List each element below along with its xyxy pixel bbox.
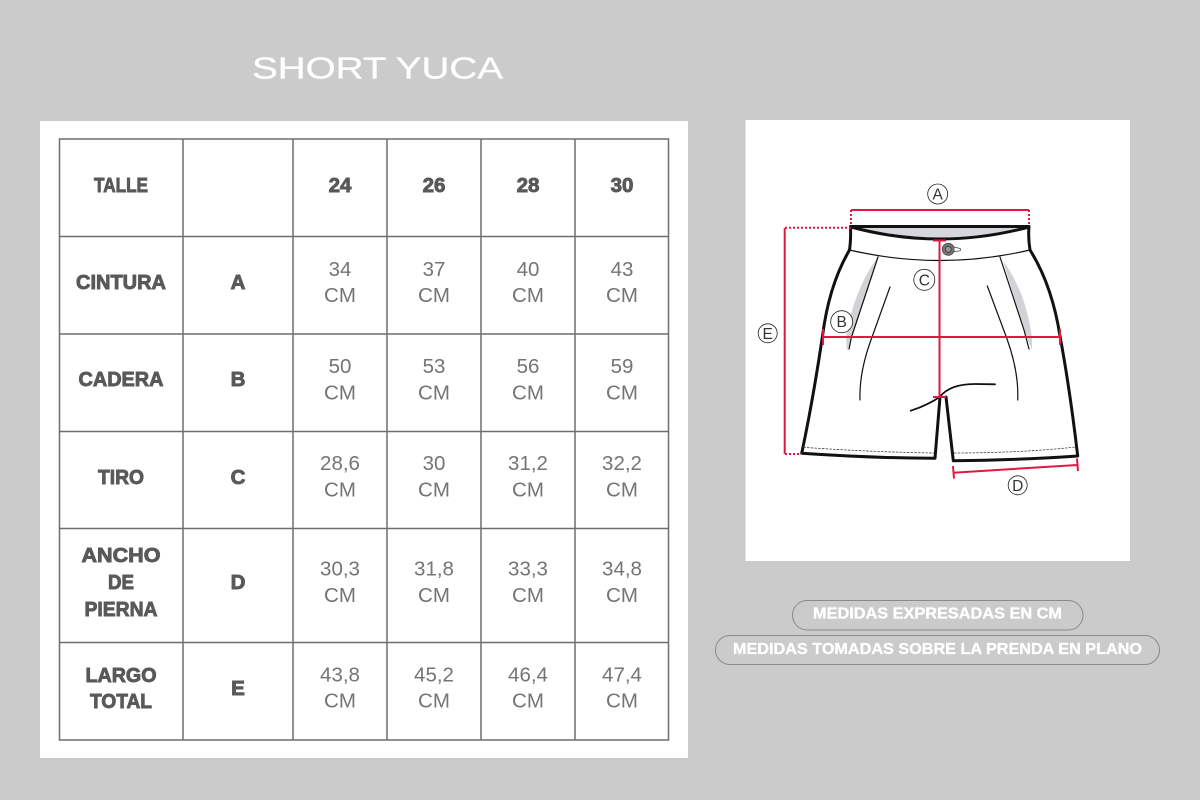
row: cintura: CM xyxy=(606,284,638,307)
row: cadera: 56 xyxy=(517,355,539,378)
row: largo total: CM xyxy=(418,690,450,712)
row: talle header: 24 xyxy=(329,174,352,197)
measure B: hip: B xyxy=(837,314,847,331)
row: ancho de pierna: 34,8 xyxy=(602,558,642,580)
row: cintura: 43 xyxy=(611,258,633,281)
row: largo total: TOTAL xyxy=(90,690,152,713)
row: tiro: CM xyxy=(324,478,356,502)
row: tiro: 32,2 xyxy=(602,452,642,475)
row: largo total: 46,4 xyxy=(508,664,548,686)
measure D: leg width: D xyxy=(1012,478,1023,495)
row: cadera: 59 xyxy=(611,355,633,378)
row: talle header: 30 xyxy=(611,174,633,197)
row: tiro: CM xyxy=(606,478,638,502)
title: SHORT YUCA xyxy=(252,52,504,86)
measure A: waist: A xyxy=(933,186,944,204)
row: ancho de pierna: DE xyxy=(108,571,134,594)
row: ancho de pierna: 33,3 xyxy=(508,558,548,580)
row: cadera: 50 xyxy=(329,355,351,378)
measure E: total length: E xyxy=(763,326,773,343)
row: ancho de pierna: CM xyxy=(512,584,544,607)
measure B: hip xyxy=(823,311,1060,345)
row: tiro: C xyxy=(231,466,246,489)
row: cintura: CM xyxy=(512,284,544,307)
row: cintura: CINTURA xyxy=(76,271,166,294)
row: largo total: CM xyxy=(324,690,356,712)
row: cadera: CADERA xyxy=(78,368,164,391)
panel: shorts measurement diagram xyxy=(746,120,1130,561)
note: units: MEDIDAS EXPRESADAS EN CM xyxy=(813,606,1062,622)
note: flat measurement: MEDIDAS TOMADAS SOBRE LA PRENDA EN PLANO xyxy=(733,641,1142,658)
measure A: waist xyxy=(851,184,1029,226)
measure D: leg width xyxy=(953,458,1078,495)
row: tiro: CM xyxy=(512,478,544,502)
icon: button xyxy=(942,243,961,255)
panel: size table xyxy=(40,121,688,758)
row: cintura: A xyxy=(231,271,246,294)
row: ancho de pierna: ANCHO xyxy=(82,544,161,567)
row: largo total: CM xyxy=(606,690,638,712)
row: ancho de pierna: D xyxy=(231,571,245,594)
row: cadera xyxy=(78,355,638,404)
shorts illustration xyxy=(802,226,1078,461)
measure C: rise xyxy=(914,240,946,397)
row: talle header: 28 xyxy=(517,174,539,197)
row: ancho de pierna: 31,8 xyxy=(414,558,454,580)
measure E: total length xyxy=(758,228,851,454)
row: ancho de pierna: CM xyxy=(606,584,638,607)
row: talle header: 26 xyxy=(423,174,445,197)
row: tiro: CM xyxy=(418,478,450,502)
row: tiro xyxy=(98,452,642,502)
row: tiro: 30 xyxy=(423,452,445,475)
row: cintura xyxy=(76,258,638,307)
row: cadera: CM xyxy=(418,382,450,404)
row: largo total: 47,4 xyxy=(602,664,642,686)
row: cintura: CM xyxy=(324,284,356,307)
measure C: rise: C xyxy=(919,272,930,289)
row: ancho de pierna: PIERNA xyxy=(84,598,158,621)
row: cintura: CM xyxy=(418,284,450,307)
row: ancho de pierna: 30,3 xyxy=(320,558,360,580)
row: cadera: CM xyxy=(606,382,638,404)
row: tiro: 28,6 xyxy=(320,452,360,475)
row: ancho de pierna: CM xyxy=(418,584,450,607)
row: largo total: E xyxy=(231,677,245,700)
row: talle header: TALLE xyxy=(94,174,148,197)
row: cadera: CM xyxy=(512,382,544,404)
row: cadera: 53 xyxy=(423,355,445,378)
row: cintura: 40 xyxy=(517,258,539,281)
row: talle header xyxy=(94,174,633,197)
row: cintura: 37 xyxy=(423,258,445,281)
row: largo total: 45,2 xyxy=(414,664,454,686)
row: tiro: 31,2 xyxy=(508,452,548,475)
row: cadera: B xyxy=(231,368,245,391)
row: largo total: CM xyxy=(512,690,544,712)
note: units xyxy=(792,600,1083,630)
table grid xyxy=(60,139,668,740)
row: ancho de pierna: CM xyxy=(324,584,356,607)
row: largo total: LARGO xyxy=(86,664,157,687)
row: largo total: 43,8 xyxy=(320,664,360,686)
row: tiro: TIRO xyxy=(98,466,144,489)
row: largo total xyxy=(86,664,642,713)
row: ancho de pierna xyxy=(82,544,642,621)
note: flat measurement xyxy=(716,636,1160,664)
row: cadera: CM xyxy=(324,382,356,404)
row: cintura: 34 xyxy=(329,258,351,281)
